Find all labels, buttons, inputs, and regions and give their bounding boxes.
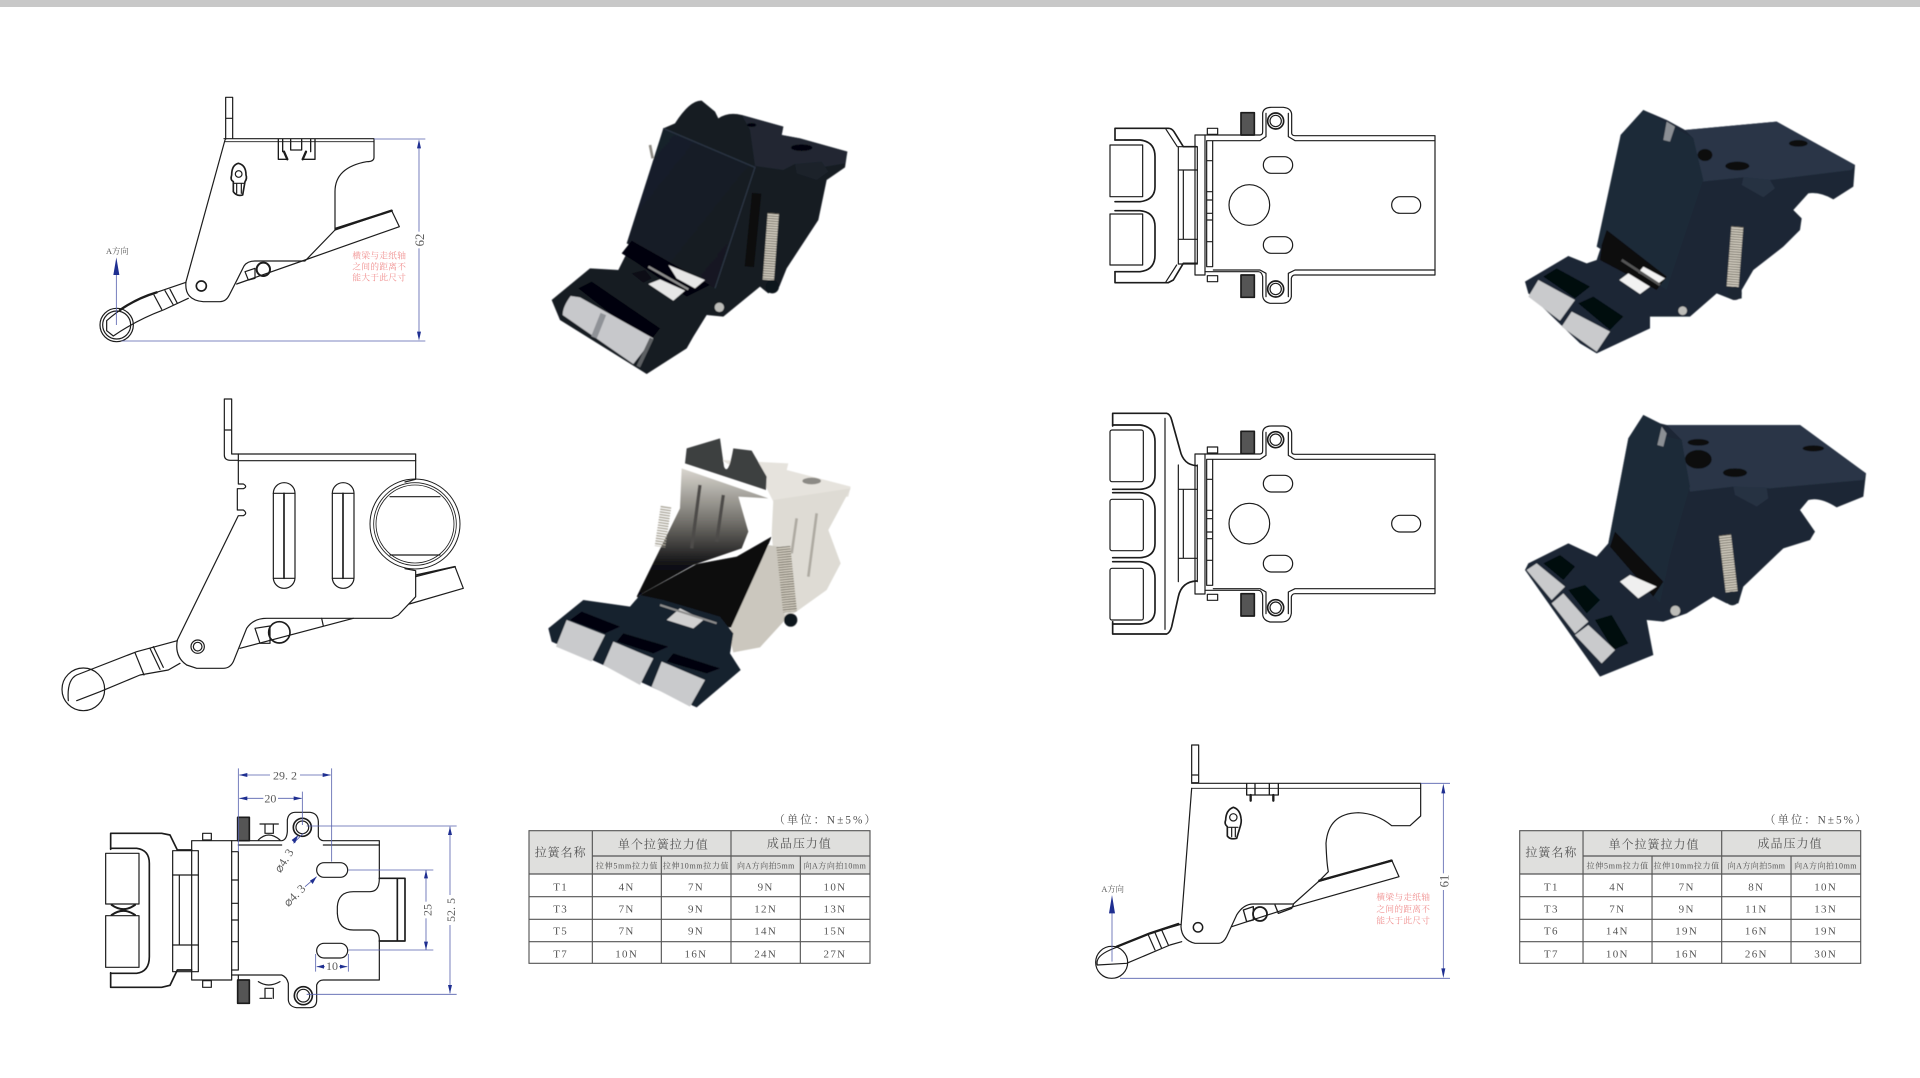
table text: 7N	[688, 882, 704, 894]
table text	[535, 835, 867, 960]
spring	[1725, 535, 1732, 592]
product photo: metal three-roller unit	[548, 438, 851, 707]
dimensions: ⌀4. 3	[281, 882, 308, 909]
table text: 10N	[824, 882, 846, 894]
table text: 成品压力值	[767, 835, 832, 850]
window	[1610, 532, 1663, 597]
ring	[370, 479, 460, 569]
table text: 单个拉簧拉力值	[1609, 836, 1699, 851]
table text: 拉伸10mm拉力值	[663, 860, 728, 870]
black interior	[637, 537, 772, 628]
table text: 向A方向拍5mm	[1728, 860, 1786, 870]
table text: 10N	[615, 948, 638, 960]
dimension 61: 61	[1437, 875, 1451, 887]
side metal	[728, 545, 785, 652]
slots	[273, 483, 295, 588]
silhouette	[1525, 110, 1855, 353]
table text: 14N	[754, 926, 777, 938]
table text: 12N	[754, 904, 777, 916]
table text: 4N	[1609, 882, 1625, 894]
face	[1608, 415, 1690, 603]
foot recess	[1543, 555, 1628, 650]
table text: 9N	[758, 882, 774, 894]
table text: T7	[1544, 948, 1559, 960]
table text: 19N	[1675, 926, 1698, 938]
lever	[240, 567, 463, 648]
dimensions: 29. 2	[273, 769, 297, 783]
dimension 61: A方向	[1101, 884, 1124, 894]
plate	[1205, 107, 1435, 303]
dimension 62: 62	[413, 234, 427, 246]
table header fill	[1520, 831, 1861, 874]
face	[1597, 110, 1703, 290]
side-view drawing (three-roller, back)	[62, 399, 463, 711]
red note: 之间的距离不	[1376, 903, 1430, 914]
face edge	[663, 128, 755, 288]
red note	[1376, 891, 1430, 925]
pivot screw	[715, 303, 724, 312]
mounting ear	[1742, 177, 1775, 197]
table text: 16N	[1675, 948, 1698, 960]
table text: T1	[1544, 882, 1559, 894]
table text: 26N	[1745, 948, 1768, 960]
table text: 27N	[824, 948, 846, 960]
table text: 16N	[1745, 926, 1768, 938]
spring table, right	[1520, 813, 1868, 963]
table text: 向A方向拍10mm	[803, 860, 867, 870]
rollers	[1528, 280, 1575, 321]
top surface	[1667, 425, 1866, 492]
spring	[1733, 227, 1737, 287]
top surface	[1685, 122, 1855, 182]
foot	[548, 595, 741, 707]
outline	[106, 812, 405, 1008]
table text: T6	[1544, 926, 1559, 938]
table text: 13N	[824, 904, 846, 916]
dimensions: 25	[421, 904, 435, 916]
red note	[352, 249, 406, 283]
table text: 15N	[824, 926, 846, 938]
spring table, left	[529, 813, 878, 963]
bracket outline	[100, 97, 399, 342]
table text: 向A方向拍10mm	[1794, 860, 1857, 870]
table text: T3	[553, 904, 568, 916]
red note: 横梁与走纸轴	[1376, 891, 1430, 902]
table text: 拉伸5mm拉力值	[596, 860, 657, 870]
table text: 19N	[1814, 926, 1837, 938]
top-view drawing (three-roller, long plate)	[1110, 413, 1435, 634]
table text: 7N	[1679, 882, 1695, 894]
right metal wall	[772, 488, 851, 623]
table text: T3	[1544, 904, 1559, 916]
red note: 能大于此尺寸	[352, 272, 406, 283]
table text: 7N	[619, 926, 635, 938]
table text: 11N	[1745, 904, 1768, 916]
table text: 向A方向拍5mm	[737, 860, 795, 870]
rollers	[556, 620, 605, 662]
holes	[1268, 432, 1284, 448]
bracket outline	[1096, 745, 1421, 978]
foot recess	[578, 282, 660, 343]
side-view drawing with 61 dimension	[1096, 745, 1451, 978]
spring bracket	[749, 193, 757, 267]
silhouette	[1525, 415, 1866, 677]
unit note: （单位：N±5%）	[774, 813, 878, 826]
table text: 24N	[754, 948, 777, 960]
red note: 之间的距离不	[352, 260, 406, 271]
rollers	[1527, 563, 1565, 600]
window	[622, 241, 710, 297]
table text: 8N	[1748, 882, 1764, 894]
spring	[768, 213, 773, 280]
product photo: black two-roller unit, rear	[1525, 110, 1855, 353]
table text: 13N	[1814, 904, 1837, 916]
red note: 能大于此尺寸	[1376, 914, 1430, 925]
table text: 拉伸5mm拉力值	[1587, 860, 1648, 870]
silhouette	[552, 101, 847, 374]
plate	[1205, 426, 1435, 622]
table text: T5	[553, 926, 568, 938]
dimensions	[238, 768, 458, 994]
dimensions: ⌀4. 3	[271, 846, 297, 875]
table grid	[1520, 831, 1861, 963]
holes	[1268, 113, 1284, 129]
top-view drawing (two-roller, long plate)	[1110, 107, 1435, 303]
product photo: black two-roller unit	[552, 101, 847, 374]
center block	[1178, 147, 1197, 264]
table text: 7N	[1609, 904, 1625, 916]
table text: 拉簧名称	[1525, 845, 1577, 860]
frame and rollers	[1115, 128, 1197, 283]
top gray bar	[0, 0, 1920, 7]
table text: 成品压力值	[1758, 835, 1822, 850]
table text: 7N	[619, 904, 635, 916]
window	[1600, 230, 1667, 290]
main face	[627, 128, 755, 288]
dimensions: 10	[326, 959, 338, 973]
table text: 单个拉簧拉力值	[618, 836, 709, 851]
bracket	[224, 399, 416, 461]
table text: 16N	[685, 948, 707, 960]
mounting ear	[1733, 487, 1768, 507]
unit note: （单位：N±5%）	[1764, 813, 1868, 826]
top-view drawing with dimensions (two-roller)	[106, 768, 458, 1008]
table text: 4N	[619, 882, 635, 894]
center block	[1178, 465, 1197, 582]
table text: 14N	[1606, 926, 1629, 938]
dimension 62: A方向	[106, 246, 129, 256]
table header fill	[529, 831, 870, 874]
frame and rollers	[1113, 413, 1197, 634]
table text: 9N	[688, 904, 704, 916]
product photo: black three-roller unit, rear	[1525, 415, 1866, 677]
table text: 拉簧名称	[535, 845, 587, 860]
table text: 拉伸10mm拉力值	[1654, 860, 1719, 870]
dimensions: 20	[264, 791, 276, 805]
table text: 30N	[1814, 948, 1837, 960]
table text: T1	[553, 882, 568, 894]
dimension 62	[106, 139, 427, 341]
side-view drawing with 62 dimension (two-roller)	[100, 97, 427, 342]
table grid	[529, 831, 870, 963]
metal top plate	[722, 460, 851, 502]
table text: 10N	[1814, 882, 1837, 894]
table text	[1525, 835, 1857, 960]
springs	[783, 547, 790, 612]
mounting ear	[795, 162, 828, 180]
table text: T7	[553, 948, 568, 960]
back wall	[637, 468, 768, 597]
dimensions: 52. 5	[444, 898, 458, 922]
table text: 10N	[1606, 948, 1629, 960]
screws	[1241, 113, 1254, 135]
table text: 9N	[688, 926, 704, 938]
top plate	[742, 115, 847, 170]
screws	[1241, 431, 1254, 454]
foot recess	[1543, 268, 1623, 330]
dark pads	[685, 438, 767, 490]
dimension 61	[1101, 783, 1451, 978]
arm and roller	[68, 641, 180, 701]
red note: 横梁与走纸轴	[352, 249, 406, 260]
roller	[563, 296, 653, 364]
table text: 9N	[1679, 904, 1695, 916]
